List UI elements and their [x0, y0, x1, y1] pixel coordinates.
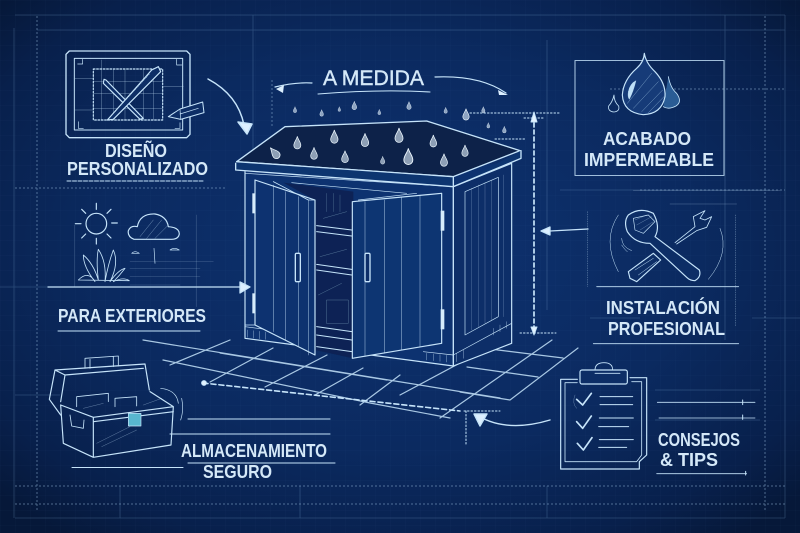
icon: clipboard checklist — [561, 363, 755, 475]
panel: instalación profesional — [588, 190, 780, 344]
panel: consejos y tips — [561, 363, 755, 475]
storage shed — [236, 101, 521, 366]
floor dimension line — [202, 381, 500, 445]
panel: almacenamiento seguro — [49, 356, 335, 482]
icon: wrench and tools — [588, 190, 780, 344]
panel: diseño personalizado — [66, 51, 208, 181]
falling droplets — [293, 101, 506, 133]
height dimension line — [470, 112, 560, 335]
roof water droplets — [267, 128, 468, 166]
icon: toolbox — [49, 356, 183, 457]
label: INSTALACIÓN — [606, 297, 720, 318]
panel: almacenamiento seguro: SEGURO — [203, 462, 272, 482]
title: A MEDIDA: A MEDIDA — [323, 67, 424, 90]
label: ACABADO — [603, 128, 691, 149]
roof — [236, 121, 521, 187]
icon: sun, cloud and plant — [74, 203, 213, 307]
shed body — [245, 163, 512, 366]
arrow to shed from exteriores — [48, 282, 250, 293]
panel: acabado impermeable — [575, 53, 724, 176]
arrow to floor from consejos — [474, 414, 550, 426]
right door — [352, 193, 444, 358]
panel: acabado impermeable: IMPERMEABLE — [584, 149, 714, 170]
floor tile grid — [143, 340, 578, 418]
title: A MEDIDA — [272, 67, 508, 128]
label: PARA EXTERIORES — [58, 305, 206, 326]
panel: consejos y tips: & TIPS — [660, 449, 718, 470]
icon: blueprint with pencils — [66, 51, 204, 138]
shed interior with shelves — [283, 183, 407, 358]
panel: diseño personalizado: PERSONALIZADO — [67, 159, 208, 179]
label: CONSEJOS — [658, 429, 740, 450]
panel: almacenamiento seguro: ALMACENAMIENTO — [181, 441, 327, 461]
icon: water drops — [609, 53, 680, 115]
label: DISEÑO — [105, 140, 167, 161]
left door — [252, 180, 315, 355]
label — [72, 419, 335, 468]
panel: instalación profesional: PROFESIONAL — [608, 318, 725, 339]
arrow to shed from instalación — [541, 227, 588, 235]
arrow to shed from diseño — [208, 79, 252, 134]
panel: para exteriores — [48, 203, 250, 331]
